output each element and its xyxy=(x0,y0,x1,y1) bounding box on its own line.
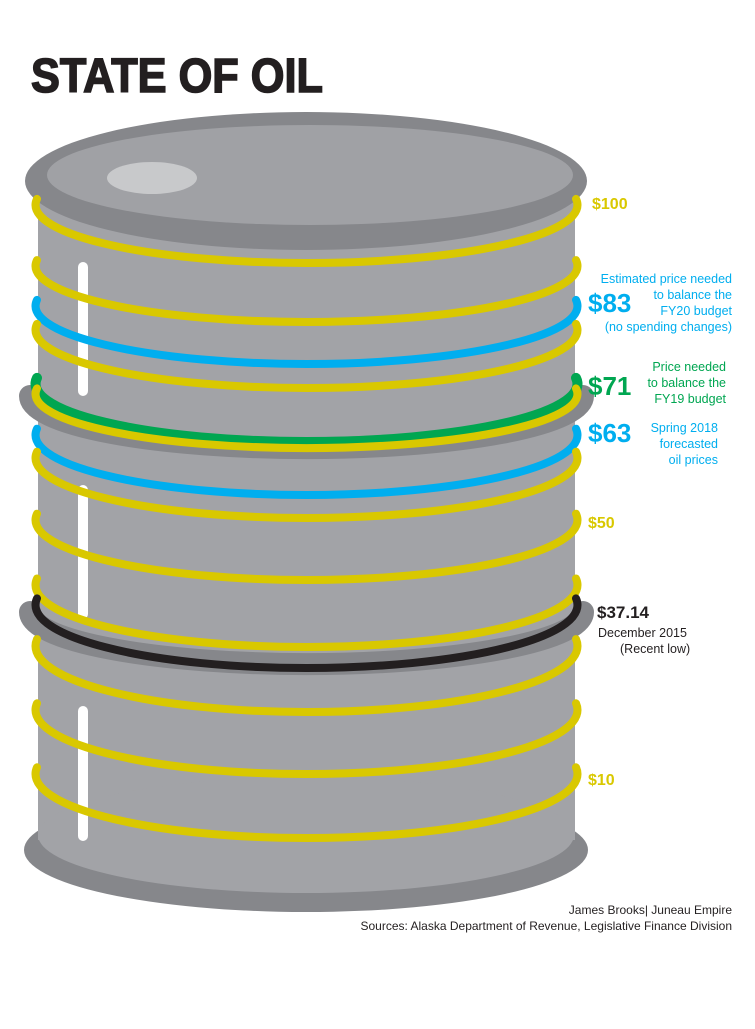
label: $63: $63 xyxy=(588,418,631,448)
top lid xyxy=(25,112,587,250)
label: $63: forecasted xyxy=(660,437,718,451)
label: $83: $83 xyxy=(588,288,631,318)
credits xyxy=(360,903,732,933)
label: $71 xyxy=(588,360,727,406)
label: $71: Price needed xyxy=(652,360,726,374)
highlight bars xyxy=(78,262,88,396)
label: $71: FY19 budget xyxy=(654,392,727,406)
label: $71: $71 xyxy=(588,371,631,401)
label: $37.14: (Recent low) xyxy=(620,642,690,656)
label: $63 xyxy=(588,418,718,467)
label: $83: to balance the xyxy=(653,288,732,302)
credits: Sources: Alaska Department of Revenue, Legislative Finance Division xyxy=(360,919,732,933)
rings xyxy=(36,199,578,838)
label: $83: Estimated price needed xyxy=(601,272,732,286)
label: $37.14 xyxy=(597,603,690,656)
label: $100: $100 xyxy=(592,196,628,213)
hoop bands xyxy=(30,396,583,448)
label: $37.14: December 2015 xyxy=(598,626,687,640)
label: $83: FY20 budget xyxy=(660,304,733,318)
label: $63: Spring 2018 xyxy=(651,421,718,435)
label: $83 xyxy=(588,272,733,334)
title: STATE OF OIL xyxy=(31,50,323,103)
label: $83: (no spending changes) xyxy=(605,320,732,334)
label: $71: to balance the xyxy=(647,376,726,390)
label: $37.14: $37.14 xyxy=(597,603,650,622)
label: $50: $50 xyxy=(588,515,615,532)
barrel xyxy=(24,112,588,912)
label: $10: $10 xyxy=(588,772,615,789)
credits: James Brooks| Juneau Empire xyxy=(569,903,732,917)
label: $63: oil prices xyxy=(669,453,718,467)
